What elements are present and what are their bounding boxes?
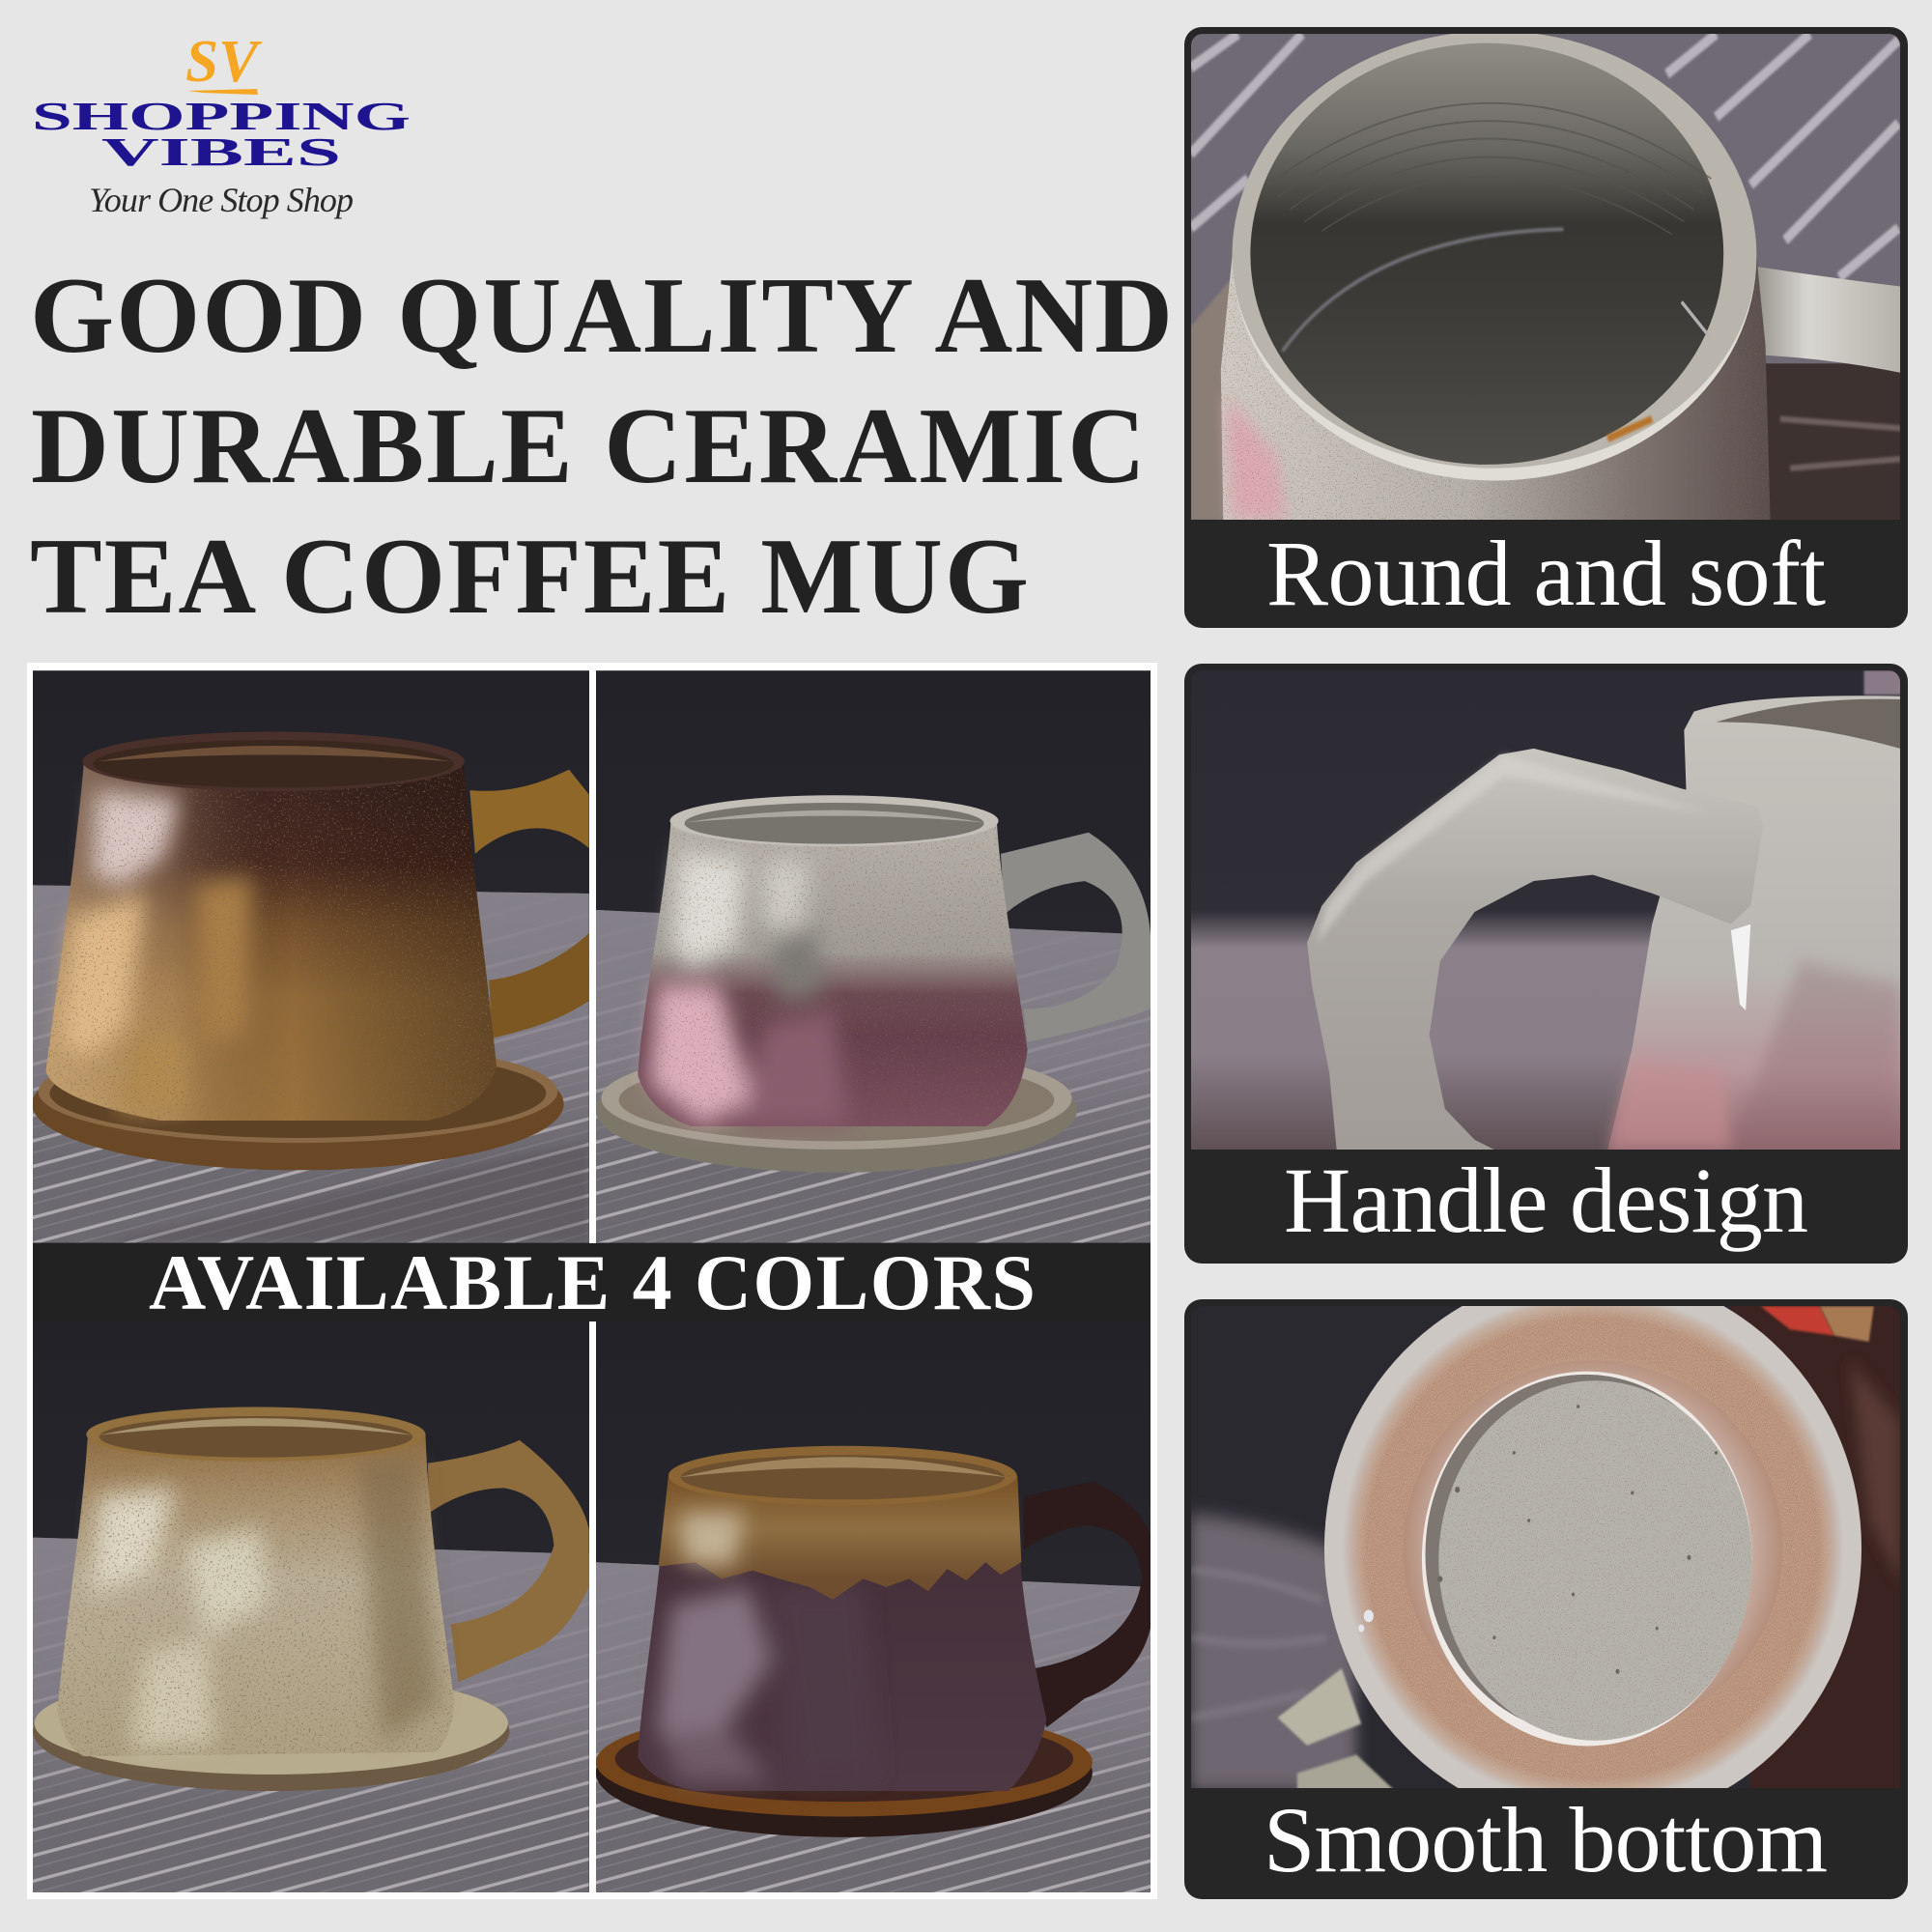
- card background: [1184, 27, 1908, 628]
- card background: [1184, 1299, 1908, 1899]
- logo: Shopping Vibes: [32, 29, 411, 219]
- caption: Round and soft: [1266, 522, 1826, 625]
- photo: mug handle close up: [1191, 670, 1903, 1151]
- photo: cream mug: [33, 1315, 590, 1901]
- logo wordmark line 1: SHOPPING: [32, 94, 411, 138]
- title: DURABLE CERAMIC: [31, 386, 1146, 506]
- title: TEA COFFEE MUG: [30, 517, 1029, 637]
- panel: smooth bottom: [1184, 1271, 1908, 1899]
- photo: brown mug: [32, 670, 590, 1248]
- photo: mug rim from above: [1191, 31, 1903, 524]
- photo: pink and white mug: [596, 670, 1153, 1248]
- panel: four colour collage: [27, 663, 1157, 1901]
- caption: Smooth bottom: [1264, 1788, 1828, 1891]
- banner: available colours: AVAILABLE 4 COLORS: [149, 1238, 1036, 1326]
- title: GOOD QUALITY AND: [30, 256, 1173, 376]
- logo monogram SV: SV: [185, 29, 263, 95]
- panel: handle design: [1184, 664, 1908, 1264]
- photo: purple mug: [596, 1315, 1153, 1901]
- panel: round and soft: [1184, 27, 1908, 628]
- logo underline stroke: [187, 89, 258, 95]
- logo wordmark line 2: VIBES: [101, 129, 341, 174]
- photo: mug underside: [1191, 1306, 1900, 1788]
- title: [30, 256, 1173, 637]
- collage white frame: [27, 663, 1157, 1899]
- caption: Handle design: [1284, 1149, 1808, 1252]
- card background: [1184, 664, 1908, 1264]
- logo tagline: Your One Stop Shop: [89, 181, 354, 219]
